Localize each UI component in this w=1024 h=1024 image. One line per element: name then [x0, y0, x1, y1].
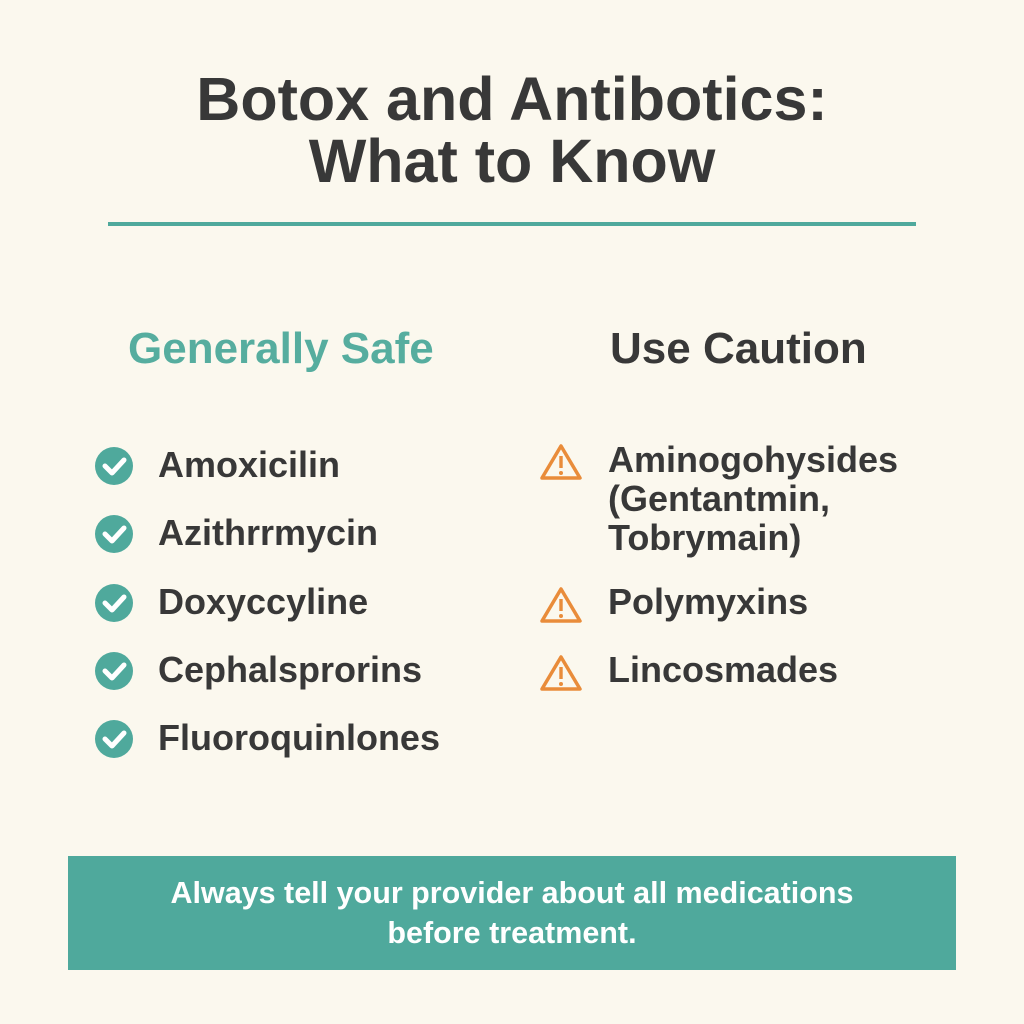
heading: use caution: Use Caution: [610, 324, 867, 373]
title: Botox and Antibotics:: [196, 65, 828, 133]
item: Azithrrmycin: Azithrrmycin: [158, 512, 378, 553]
item: Fluoroquinlones: Fluoroquinlones: [158, 717, 440, 758]
banner: footer note: [68, 856, 956, 970]
item: Doxyccyline: Doxyccyline: [158, 581, 368, 622]
item: Aminogohysides: Tobrymain): [608, 517, 801, 558]
item: Polymyxins: Polymyxins: [608, 581, 808, 622]
item: Amoxicilin: Amoxicilin: [158, 444, 340, 485]
item: Aminogohysides: Aminogohysides: [608, 439, 898, 480]
item: Aminogohysides: [540, 439, 898, 558]
heading: generally safe: Generally Safe: [128, 324, 434, 373]
item: Lincosmades: Lincosmades: [608, 649, 838, 690]
banner: footer note: before treatment.: [387, 916, 637, 950]
panel: caution list: [540, 439, 898, 691]
item: Aminogohysides: (Gentantmin,: [608, 478, 830, 519]
item: Cephalsprorins: Cephalsprorins: [158, 649, 422, 690]
title: [196, 65, 828, 195]
panel: safe list: [95, 444, 440, 758]
banner: footer note: Always tell your provider about all medications: [170, 876, 854, 910]
title: What to Know: [309, 127, 715, 195]
